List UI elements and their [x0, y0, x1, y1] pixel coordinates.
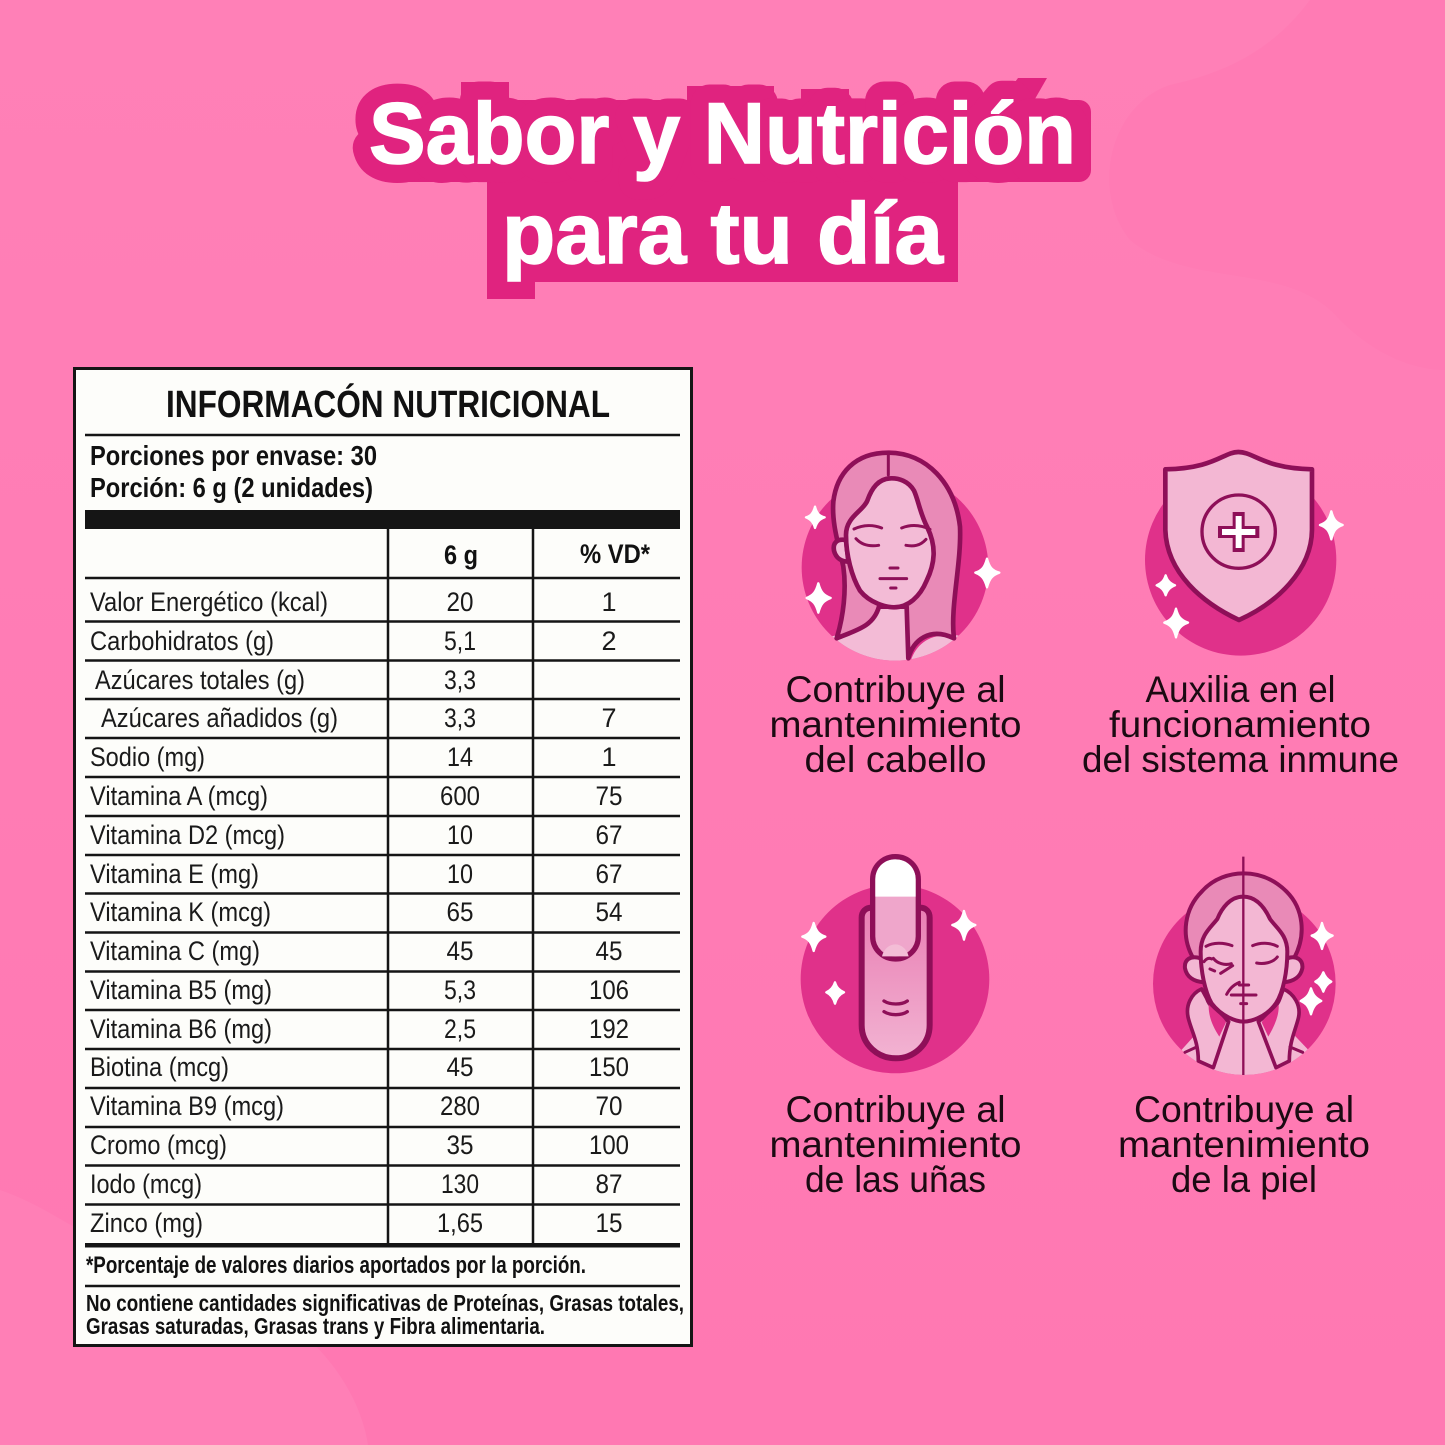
neck and shoulders — [832, 609, 958, 661]
face — [846, 478, 934, 607]
percent daily values: 67 — [596, 859, 622, 889]
percent daily values: 67 — [596, 820, 622, 850]
serving info: Porción: 6 g (2 unidades) — [90, 472, 373, 503]
caption: skin: de la piel — [1171, 1159, 1317, 1200]
nail — [873, 857, 918, 959]
percent daily values: 2 — [601, 626, 617, 656]
nutrient names: Vitamina C (mg) — [90, 936, 260, 966]
nutrient names: Biotina (mcg) — [90, 1052, 229, 1082]
percent daily values: 70 — [596, 1091, 622, 1121]
values per portion: 5,1 — [444, 626, 476, 656]
percent daily values: 7 — [601, 703, 617, 733]
icon: nails — [801, 857, 989, 1073]
ear — [834, 540, 848, 562]
disclaimer: No contiene cantidades significativas de Proteínas, Grasas totales, — [86, 1290, 684, 1316]
nutrient names: Carbohidratos (g) — [90, 626, 274, 656]
column headers — [444, 539, 650, 570]
percent daily values — [589, 587, 629, 1238]
nutrient names: Vitamina D2 (mcg) — [90, 820, 285, 850]
values per portion: 1,65 — [437, 1208, 483, 1238]
percent daily values: 87 — [596, 1169, 622, 1199]
footnote: *Porcentaje de valores diarios aportados por la porción. — [86, 1252, 586, 1279]
caption: immune system: del sistema inmune — [1082, 739, 1399, 780]
caption: immune system: Auxilia en el — [1146, 669, 1336, 710]
values per portion: 65 — [446, 897, 474, 927]
percent daily values: 100 — [589, 1130, 629, 1160]
nutrient names: Vitamina B6 (mg) — [90, 1014, 272, 1044]
cross — [1218, 512, 1259, 552]
percent daily values: 1 — [601, 742, 617, 772]
percent daily values: 1 — [601, 587, 617, 617]
values per portion: 14 — [447, 742, 473, 772]
values per portion: 10 — [447, 859, 473, 889]
caption: immune system: funcionamiento — [1109, 704, 1371, 745]
nutrient names: Azúcares añadidos (g) — [101, 703, 338, 733]
values per portion: 45 — [446, 936, 474, 966]
values per portion: 45 — [446, 1052, 474, 1082]
nutrient names: Vitamina E (mg) — [90, 859, 259, 889]
nutrient names: Vitamina K (mcg) — [90, 897, 271, 927]
caption: hair — [770, 669, 1022, 780]
nutrient names: Vitamina B9 (mcg) — [90, 1091, 284, 1121]
title text: para tu día — [502, 186, 944, 282]
serving info — [90, 440, 377, 503]
caption: nails: Contribuye al — [786, 1089, 1006, 1130]
values per portion: 3,3 — [444, 703, 476, 733]
sparkles — [802, 911, 975, 1004]
values per portion: 10 — [447, 820, 473, 850]
values per portion: 35 — [446, 1130, 474, 1160]
values per portion — [437, 587, 483, 1238]
caption: hair: Contribuye al — [786, 669, 1006, 710]
shield — [1165, 452, 1312, 620]
nutrient names: Iodo (mcg) — [90, 1169, 202, 1199]
caption: skin — [1118, 1089, 1370, 1200]
panel: nutrition table — [74, 368, 692, 1346]
nutrient names: Azúcares totales (g) — [95, 665, 305, 695]
values per portion: 600 — [440, 781, 480, 811]
values per portion: 280 — [440, 1091, 480, 1121]
nutrient names: Valor Energético (kcal) — [90, 587, 328, 617]
sparkles — [1301, 923, 1333, 1014]
values per portion: 5,3 — [444, 975, 476, 1005]
hair — [1186, 873, 1302, 958]
finger — [862, 908, 930, 1058]
ears — [1185, 957, 1302, 982]
column headers: % VD* — [580, 539, 650, 569]
nutrient names: Cromo (mcg) — [90, 1130, 227, 1160]
percent daily values: 106 — [589, 975, 629, 1005]
percent daily values: 192 — [589, 1014, 629, 1044]
percent daily values: 150 — [589, 1052, 629, 1082]
column headers: 6 g — [444, 540, 478, 570]
caption: immune system — [1082, 669, 1399, 780]
hands — [1187, 989, 1229, 1068]
icon: immune shield — [1145, 452, 1343, 656]
icon: skin — [1153, 857, 1336, 1085]
table heading: INFORMACÓN NUTRICIONAL — [166, 382, 610, 426]
sparkles — [806, 507, 999, 613]
nutrient names: Zinco (mg) — [90, 1208, 203, 1238]
center divider — [1240, 857, 1247, 1075]
caption: nails: mantenimiento — [770, 1124, 1022, 1165]
sparkles — [1157, 511, 1343, 637]
percent daily values: 15 — [596, 1208, 622, 1238]
title backing shape: Sabor y Nutrición — [369, 86, 1076, 182]
hair — [833, 453, 960, 658]
nutrient names — [90, 587, 338, 1238]
caption: nails — [770, 1089, 1022, 1200]
neck and chest — [1182, 1020, 1308, 1075]
caption: nails: de las uñas — [805, 1159, 986, 1200]
serving info: Porciones por envase: 30 — [90, 440, 377, 471]
nutrient names: Sodio (mg) — [90, 742, 205, 772]
title backing shape — [369, 78, 1091, 299]
values per portion: 3,3 — [444, 665, 476, 695]
face — [1201, 897, 1287, 1022]
disclaimer: Grasas saturadas, Grasas trans y Fibra alimentaria. — [86, 1313, 545, 1339]
values per portion: 20 — [446, 587, 474, 617]
values per portion: 130 — [441, 1169, 479, 1199]
icon: hair — [802, 453, 999, 670]
nutrient names: Vitamina A (mcg) — [90, 781, 268, 811]
caption: skin: Contribuye al — [1134, 1089, 1354, 1130]
percent daily values: 54 — [596, 897, 622, 927]
caption: hair: mantenimiento — [770, 704, 1022, 745]
title text — [369, 86, 1076, 282]
facial features and wrinkles — [1204, 943, 1277, 1004]
values per portion: 2,5 — [444, 1014, 476, 1044]
percent daily values: 75 — [596, 781, 622, 811]
caption: skin: mantenimiento — [1118, 1124, 1370, 1165]
table rules — [85, 435, 680, 1286]
title text: Sabor y Nutrición — [369, 86, 1076, 182]
title — [369, 78, 1091, 299]
percent daily values: 45 — [596, 936, 622, 966]
disclaimer — [86, 1290, 684, 1339]
caption: hair: del cabello — [804, 739, 986, 780]
nutrient names: Vitamina B5 (mg) — [90, 975, 272, 1005]
